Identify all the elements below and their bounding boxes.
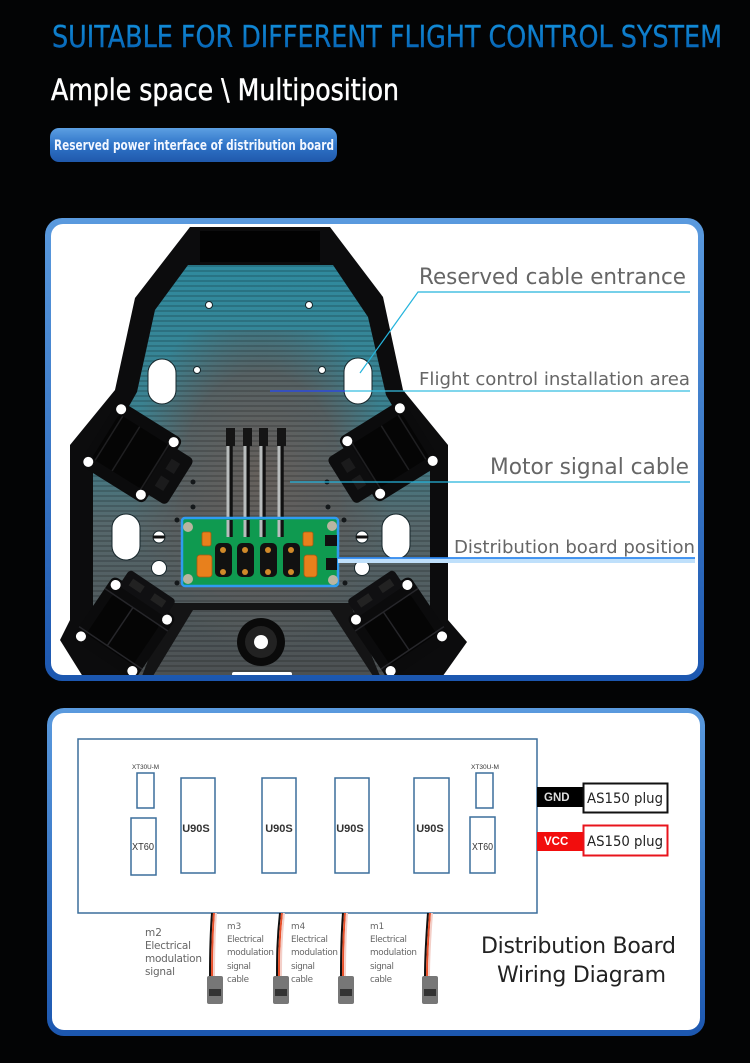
m2 label: m2	[145, 927, 162, 939]
callout: distribution board position: Distribution board position	[454, 537, 695, 558]
diagram caption: Distribution Board	[481, 934, 676, 959]
panel: wiring diagram	[47, 708, 705, 1036]
U90S connector 1: U90S	[182, 823, 210, 835]
m4 label: Electrical	[291, 935, 328, 945]
U90S connector 4: U90S	[416, 823, 444, 835]
m1 label: modulation	[370, 948, 417, 958]
m1 label: Electrical	[370, 935, 407, 945]
left connectors	[131, 764, 159, 875]
U90S connector 2: U90S	[265, 823, 293, 835]
motor mount: lower left	[76, 570, 175, 675]
m3 label: cable	[227, 975, 249, 985]
m4 label: signal	[291, 962, 315, 972]
left connectors: XT60	[132, 842, 154, 853]
motor mount: upper left	[83, 404, 192, 504]
m2 label: Electrical	[145, 940, 191, 952]
bottom notch	[232, 672, 292, 675]
GND lead and plug: GND	[544, 792, 570, 804]
m4 label: m4	[291, 922, 306, 932]
m1 label: signal	[370, 962, 394, 972]
U90S connector 2	[262, 778, 296, 873]
badge: reserved power interface: Reserved power interface of distribution board	[54, 138, 334, 154]
distribution board	[182, 518, 338, 586]
motor signal cables	[226, 428, 286, 517]
U90S connector 4	[414, 778, 449, 873]
badge: reserved power interface	[50, 128, 337, 162]
VCC lead and plug: AS150 plug	[587, 834, 663, 850]
slots and holes	[112, 302, 410, 576]
rear bar detail	[200, 231, 320, 262]
m4 label: cable	[291, 975, 313, 985]
VCC lead and plug	[537, 826, 668, 856]
lower crossbar	[142, 603, 380, 676]
motor mount: lower right	[348, 570, 448, 675]
callout: motor signal cable: Motor signal cable	[490, 455, 689, 480]
m3 label: signal	[227, 962, 251, 972]
board outline	[78, 739, 537, 913]
right connectors	[470, 764, 499, 873]
VCC lead and plug: VCC	[544, 836, 568, 848]
m4 label: modulation	[291, 948, 338, 958]
motor mount: upper right	[328, 403, 438, 503]
m3 label: Electrical	[227, 935, 264, 945]
subtitle: Ample space \ Multiposition	[51, 73, 399, 107]
m3 label: modulation	[227, 948, 274, 958]
U90S connector 3	[335, 778, 369, 873]
panel: frame photo	[45, 218, 704, 681]
frame photo	[60, 227, 467, 681]
callout: reserved cable entrance: Reserved cable entrance	[419, 265, 686, 290]
m3 label: m3	[227, 922, 241, 932]
diagram caption: Wiring Diagram	[497, 963, 666, 988]
callout: reserved cable entrance	[360, 265, 690, 373]
mounting plate	[93, 265, 430, 680]
left connectors: XT30U-M	[132, 764, 159, 771]
callout: distribution board position	[338, 537, 695, 563]
m1 label: cable	[370, 975, 392, 985]
callout: flight control installation area: Flight control installation area	[419, 369, 690, 390]
GND lead and plug	[537, 784, 668, 812]
U90S connector 3: U90S	[336, 823, 364, 835]
m2 label: modulation	[145, 953, 202, 965]
right connectors: XT60	[472, 842, 493, 853]
carbon frame body	[60, 227, 467, 680]
signal leads and plugs	[207, 913, 438, 1004]
U90S connector 1	[181, 778, 215, 873]
GND lead and plug: AS150 plug	[587, 791, 663, 807]
right connectors: XT30U-M	[471, 764, 499, 771]
m1 label: m1	[370, 922, 384, 932]
m2 label: signal	[145, 966, 175, 978]
centre grommet	[237, 618, 285, 666]
